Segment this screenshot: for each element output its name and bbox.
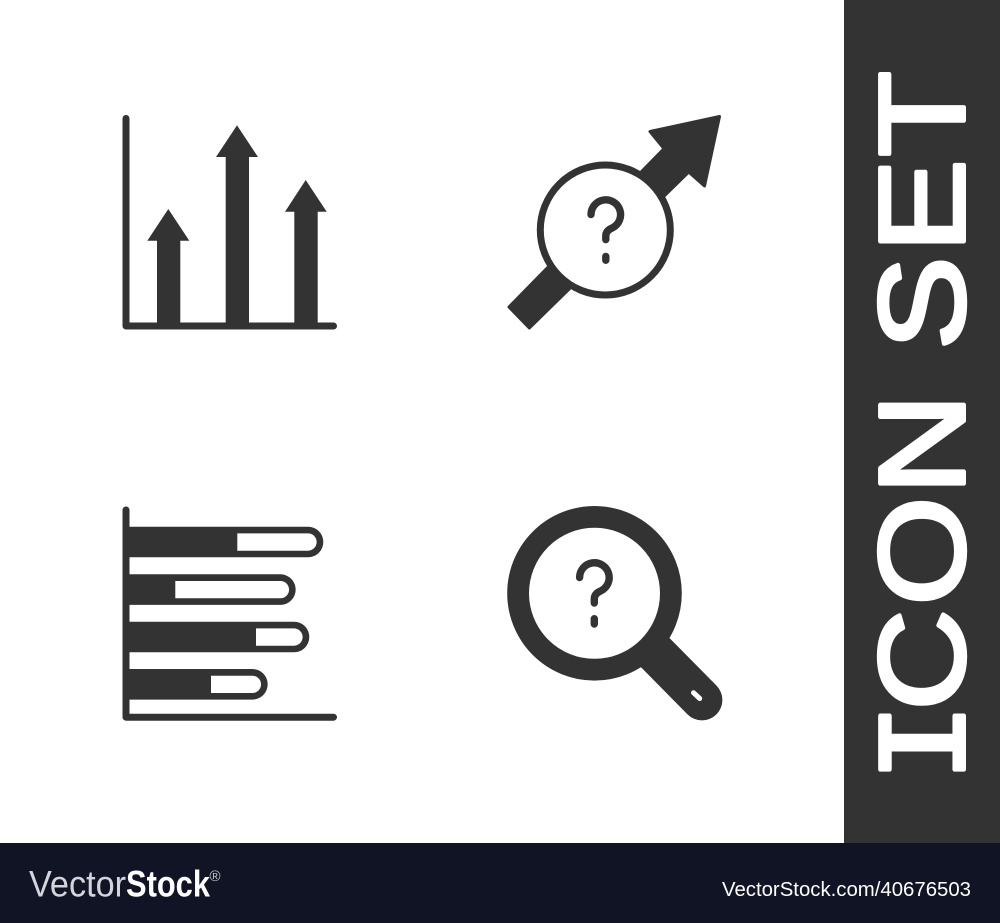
footer bar <box>0 843 1000 923</box>
sidebar heading: ICON SET: C <box>854 609 990 711</box>
footer logo: VectorStock: Vector <box>29 864 126 904</box>
sidebar heading: ICON SET: T <box>854 71 990 157</box>
sidebar heading: ICON SET: N <box>854 394 990 495</box>
sidebar heading: ICON SET: S <box>854 256 990 350</box>
footer logo: VectorStock <box>29 864 221 904</box>
icon: horizontal progress bars chart <box>126 510 334 717</box>
sidebar heading: ICON SET: E <box>854 159 990 253</box>
sidebar heading: ICON SET: O <box>854 496 990 606</box>
sidebar heading: ICON SET: I <box>858 703 992 782</box>
footer logo: VectorStock: ® <box>210 868 221 885</box>
icon: magnifying glass with question mark <box>518 517 702 700</box>
footer image id: VectorStock.com/40676503 <box>722 879 971 901</box>
footer logo: VectorStock: Stock <box>126 864 210 904</box>
icon: bar chart with up arrows <box>126 118 334 326</box>
icon: magnifier with question mark on diagonal arrow <box>509 116 720 328</box>
sidebar panel <box>844 0 1000 843</box>
sidebar heading: ICON SET <box>854 71 992 782</box>
